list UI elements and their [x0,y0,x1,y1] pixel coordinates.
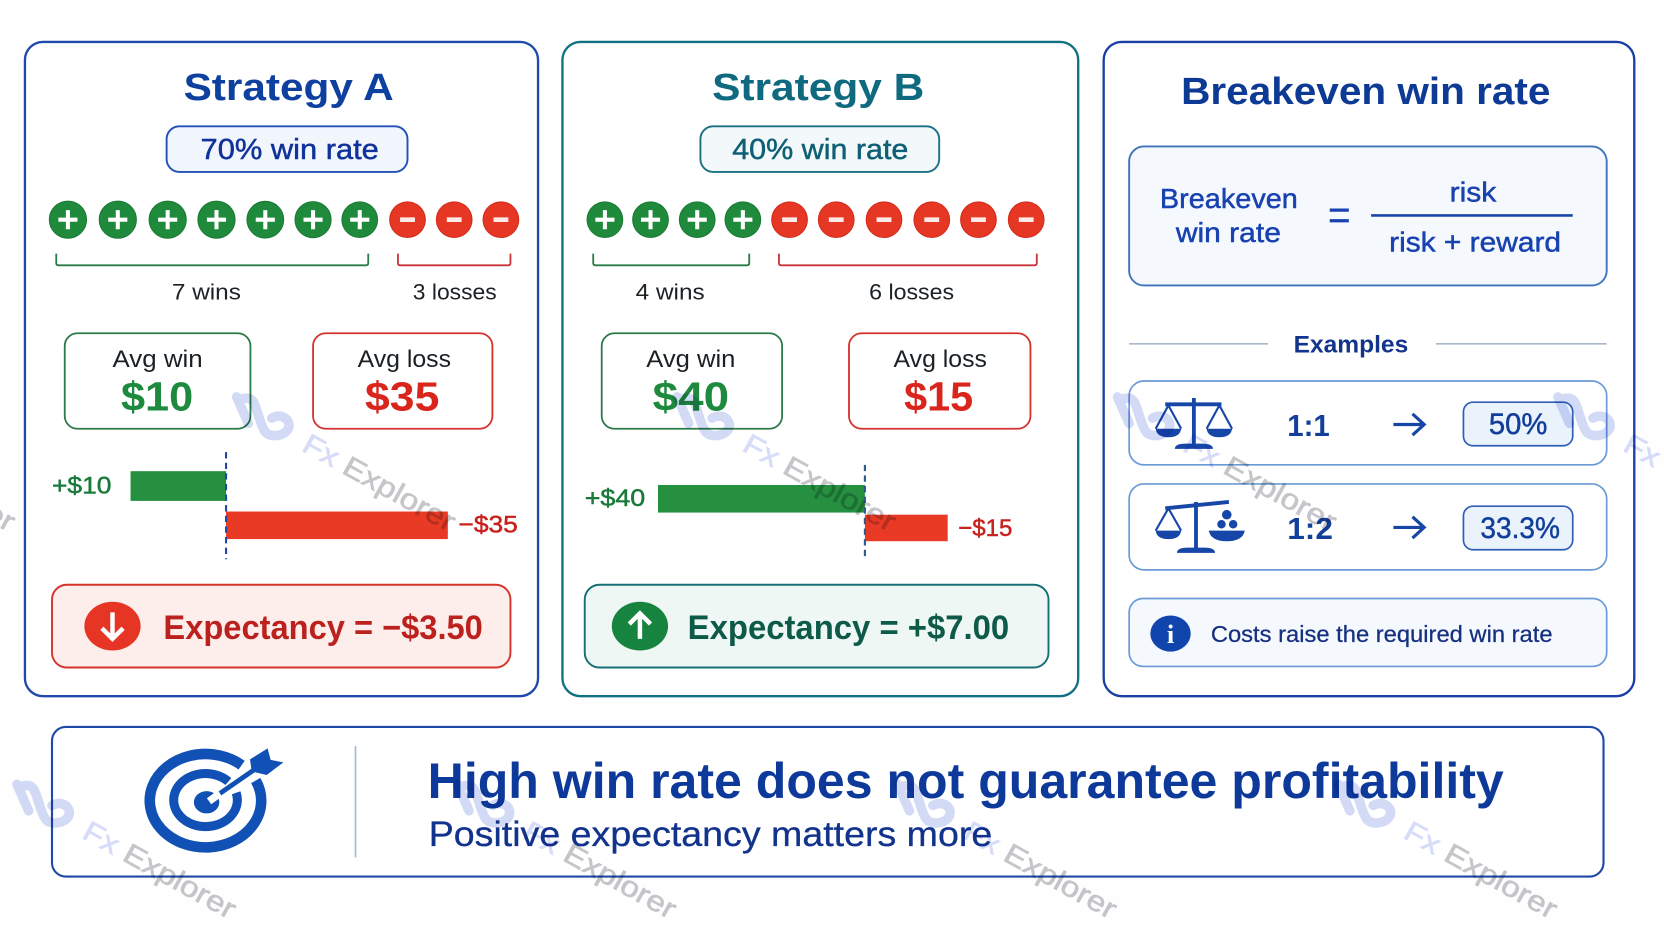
formula box [1129,146,1607,285]
watermark 8: Fx Explorer [958,815,1123,926]
stat box: avg win B: $40 [653,374,729,420]
label: 7 wins: 7 wins [172,279,241,304]
note: costs [1129,599,1607,666]
bracket: 3 losses [398,254,510,265]
formula box: Breakeven [1160,183,1298,214]
badge: 40% win rate [700,126,939,172]
formula box: win rate [1175,217,1281,248]
watermark 6: Fx Explorer [77,815,242,926]
icon: tilted scale [1156,502,1245,553]
heading: Strategy A: Strategy A [184,66,394,109]
arrow [1393,517,1424,538]
headline: High win rate does not guarantee profitability [428,753,1504,809]
callout: expectancy A: Expectancy = −$3.50 [163,609,483,647]
bar chart B [585,465,1012,559]
panel border A [25,42,538,696]
win and loss dots B [587,202,1044,238]
callout: expectancy B [585,585,1048,668]
note: costs: Costs raise the required win rate [1211,621,1553,647]
heading: Breakeven win rate: Breakeven win rate [1181,70,1550,113]
example row 1:1: 1:1 [1287,408,1330,443]
stat box: avg win A: $10 [121,374,193,420]
bar chart A [52,452,518,559]
watermark 1 [237,397,461,539]
stat box: avg loss B: $15 [904,374,973,420]
stat box: avg loss B: Avg loss [894,346,987,373]
formula box: risk [1450,177,1497,208]
result pill: 33.3%: 33.3% [1480,512,1560,545]
watermark 6 [17,784,242,926]
watermark 3: Fx Explorer [1178,428,1342,539]
badge: 70% win rate: 70% win rate [201,134,379,166]
bar chart B: −$15 [958,515,1012,542]
bracket: 7 wins [56,254,368,265]
stat box: avg win B: Avg win [646,346,735,373]
stat box: avg loss B [849,333,1030,429]
icon: target with arrow [150,748,283,847]
watermarks [0,397,1664,926]
watermark 9 [1338,784,1563,926]
panel: breakeven win rate [1104,42,1634,696]
watermark 7 [457,784,682,926]
example row 1:1 [1129,381,1607,465]
arrow [1393,414,1424,435]
callout: expectancy A [52,585,510,668]
icon: info [1150,616,1191,652]
stat box: avg win A: Avg win [112,346,203,373]
banner: takeaway [52,727,1604,877]
subheading: Examples: Examples [1294,331,1408,358]
icon: balanced scale [1156,398,1232,449]
panel border B [562,42,1078,696]
icon: up arrow [612,602,668,651]
icon: info: i [1167,619,1174,649]
formula box: risk + reward [1389,227,1561,258]
win and loss dots A [49,201,519,238]
bar chart B: +$40 [585,485,645,512]
label: 3 losses: 3 losses [413,279,497,304]
watermark 8 [898,784,1123,926]
result pill: 50% [1463,402,1573,446]
bar chart A: +$10 [52,472,111,499]
bar chart A: −$35 [458,512,518,539]
label: 6 losses: 6 losses [869,279,954,304]
result pill: 50%: 50% [1489,408,1547,441]
stat box: avg loss A: Avg loss [358,346,451,373]
watermark 2: Fx Explorer [737,428,902,539]
bracket: 4 wins [593,254,749,265]
panel border C [1104,42,1634,696]
panel: strategy A [25,42,538,696]
watermark 4 [1558,397,1664,539]
badge: 70% win rate [167,126,408,172]
result pill: 33.3% [1463,506,1573,550]
bracket: 6 losses [779,254,1037,265]
icon: down arrow [84,602,141,651]
heading: Strategy B: Strategy B [712,66,924,109]
stat box: avg win B [602,333,782,429]
watermark 3 [1117,397,1342,539]
example row 1:2: 1:2 [1287,511,1333,546]
watermark 1: Fx Explorer [297,428,461,539]
watermark 2 [677,397,902,539]
watermark 9: Fx Explorer [1398,815,1563,926]
label: 4 wins: 4 wins [636,279,705,304]
badge: 40% win rate: 40% win rate [732,134,908,166]
stat box: avg win A [65,333,250,429]
example row 1:2 [1129,484,1607,570]
callout: expectancy B: Expectancy = +$7.00 [688,609,1009,647]
stat box: avg loss A [313,333,492,429]
stat box: avg loss A: $35 [365,374,439,420]
watermark 7: Fx Explorer [518,815,682,926]
subheadline: Positive expectancy matters more [429,815,992,854]
panel: strategy B [562,42,1078,696]
